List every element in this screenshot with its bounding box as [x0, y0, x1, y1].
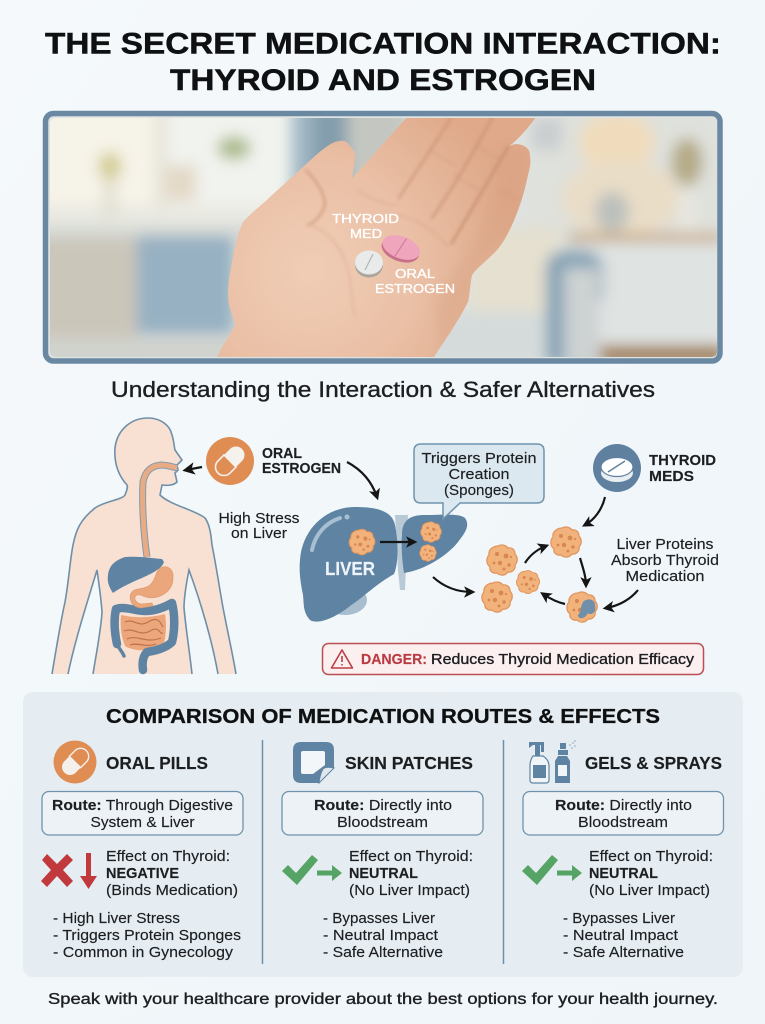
panel: comparison of medication routes: [23, 692, 743, 977]
route box: Bloodstream: [337, 814, 428, 831]
effect text: (No Liver Impact): [349, 882, 470, 899]
callout: triggers protein creation: Triggers Protein: [422, 450, 536, 467]
pink estrogen pill: [378, 231, 423, 267]
label: thyroid meds: MEDS: [649, 469, 694, 485]
column: gels and sprays: [522, 740, 724, 961]
stomach: [130, 567, 173, 608]
hand: [216, 116, 537, 360]
icon: green check and arrow: [282, 855, 342, 885]
bullet list: - Safe Alternative: [323, 944, 443, 961]
effect text: NEGATIVE: [106, 865, 179, 882]
bullet list: - Bypasses Liver: [323, 910, 435, 927]
panel: hero photo of hand holding pills: [30, 100, 728, 368]
icon: capsule: [54, 740, 96, 784]
title: [45, 28, 721, 97]
label: high stress on liver: High Stress: [218, 511, 300, 527]
bullet list: - Safe Alternative: [563, 944, 684, 961]
small liver: [108, 557, 164, 593]
comparison heading: COMPARISON OF MEDICATION ROUTES & EFFECTS: [106, 705, 660, 728]
column: skin patches: [282, 742, 483, 961]
pill label: thyroid med: THYROID: [332, 212, 399, 226]
effect text: Effect on Thyroid:: [349, 848, 473, 865]
body diagram with digestive system: [52, 418, 236, 674]
pill label: oral estrogen: ESTROGEN: [375, 282, 455, 296]
callout: triggers protein creation: [414, 444, 544, 519]
label: thyroid meds: [649, 453, 716, 485]
route box: [523, 792, 724, 835]
route box: Route: Through Digestive: [52, 797, 233, 814]
effect text: Effect on Thyroid:: [106, 848, 230, 865]
pill label: oral estrogen: [375, 267, 455, 296]
label: high stress on liver: [218, 511, 300, 542]
small intestine: [121, 614, 166, 650]
label: oral estrogen: ESTROGEN: [262, 461, 341, 477]
route box: Route: Directly into: [314, 797, 452, 814]
bullet list: - Bypasses Liver: [563, 910, 675, 927]
callout: danger: [322, 644, 704, 674]
title: THYROID AND ESTROGEN: [170, 64, 596, 97]
esophagus: [143, 465, 177, 557]
effect text: NEUTRAL: [349, 865, 418, 882]
liver label: LIVER: [325, 559, 375, 579]
column: oral pills: ORAL PILLS: [106, 753, 208, 773]
effect text: [106, 848, 238, 899]
route box: Route: Directly into: [555, 797, 692, 814]
bullet list: [323, 910, 443, 961]
white thyroid pill: [355, 250, 383, 278]
bullet list: [563, 910, 684, 961]
label: liver proteins absorb medication: [611, 536, 719, 585]
label: liver proteins absorb medication: Medication: [626, 568, 704, 585]
title: THE SECRET MEDICATION INTERACTION:: [45, 28, 721, 60]
bullet list: [53, 910, 241, 961]
column: skin patches: SKIN PATCHES: [345, 753, 473, 773]
label: liver proteins absorb medication: Liver Proteins: [616, 536, 714, 553]
icon: warning triangle: [332, 650, 352, 668]
effect text: (Binds Medication): [106, 882, 238, 899]
pill label: thyroid med: [332, 212, 399, 241]
callout: danger: DANGER:: [361, 651, 427, 668]
large intestine: [115, 603, 174, 670]
icon: pump bottle and spray: [529, 740, 576, 783]
effect text: NEUTRAL: [589, 865, 658, 882]
icon: red x and down arrow: [41, 853, 97, 889]
icon: patch: [293, 742, 334, 783]
icon: thyroid pill: [593, 444, 641, 492]
effect text: Effect on Thyroid:: [589, 848, 713, 865]
route box: System & Liver: [90, 814, 194, 831]
pill label: thyroid med: MED: [350, 227, 382, 241]
blurred living room background: [50, 118, 717, 357]
label: oral estrogen: ORAL: [262, 446, 302, 462]
callout: triggers protein creation: (Sponges): [444, 482, 514, 499]
effect text: (No Liver Impact): [589, 882, 710, 899]
effect text: [589, 848, 713, 899]
label: thyroid meds: THYROID: [649, 453, 716, 469]
callout: triggers protein creation: Creation: [448, 466, 510, 483]
route box: Bloodstream: [578, 814, 668, 831]
finger creases and palm folds: [304, 118, 510, 328]
column: gels and sprays: GELS & SPRAYS: [585, 753, 722, 773]
label: oral estrogen: [262, 446, 341, 477]
cycle arrows: [380, 497, 638, 608]
label: high stress on liver: on Liver: [231, 526, 287, 542]
arrow: capsule to mouth: [186, 467, 202, 470]
heading: understanding the interaction: Understanding the Interaction & Safer Alternatives: [111, 377, 655, 402]
footer note: Speak with your healthcare provider about the best options for your health journey.: [48, 991, 718, 1008]
route box: [42, 792, 243, 835]
bullet list: - Common in Gynecology: [53, 944, 234, 961]
pill label: oral estrogen: ORAL: [395, 267, 435, 281]
effect text: [349, 848, 473, 899]
liver illustration: [300, 507, 467, 622]
bullet list: - Neutral Impact: [563, 927, 679, 944]
icon: oral estrogen capsule: [206, 437, 254, 485]
absorbed medication on sponge: [578, 599, 595, 618]
callout: danger: Reduces Thyroid Medication Efficacy: [431, 651, 695, 668]
bullet list: - Neutral Impact: [323, 927, 439, 944]
arrow: estrogen to liver: [347, 462, 377, 497]
label: liver proteins absorb medication: Absorb Thyroid: [611, 552, 719, 569]
route box: [282, 792, 483, 835]
icon: green check and arrow: [522, 855, 582, 885]
bullet list: - High Liver Stress: [53, 910, 180, 927]
bullet list: - Triggers Protein Sponges: [53, 927, 241, 944]
protein sponges: [349, 522, 597, 622]
column: oral pills: [41, 740, 243, 961]
